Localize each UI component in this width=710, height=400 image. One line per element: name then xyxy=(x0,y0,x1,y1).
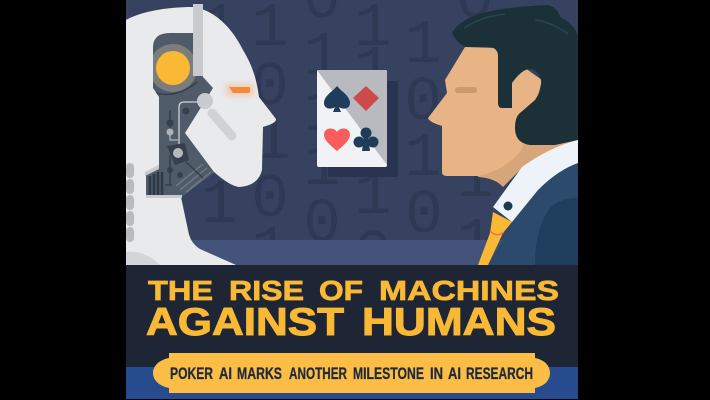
binary digits backdrop: 1 xyxy=(354,36,392,107)
banner text: MARKS xyxy=(237,364,282,383)
card face xyxy=(317,70,387,167)
suit shade xyxy=(535,198,578,265)
banner text xyxy=(170,364,533,383)
binary digits backdrop: 0 xyxy=(404,67,442,138)
title line 1: MACHINES xyxy=(379,275,559,306)
title band xyxy=(126,265,578,367)
title line 2: AGAINST xyxy=(146,301,344,344)
title line 1 xyxy=(148,275,559,306)
floor band xyxy=(126,240,578,265)
robot eye xyxy=(226,84,254,96)
hair xyxy=(452,5,578,145)
card shadow xyxy=(328,81,398,177)
binary digits backdrop: 0 xyxy=(303,189,341,260)
title xyxy=(146,275,559,344)
subtitle banner xyxy=(153,353,550,393)
jaw joint xyxy=(197,93,213,109)
banner text: RESEARCH xyxy=(466,364,533,383)
banner text: AI xyxy=(448,364,461,383)
binary digits backdrop: 0 xyxy=(251,52,289,123)
diamond xyxy=(353,86,379,111)
infographic header xyxy=(126,0,578,399)
binary digits backdrop: 1 xyxy=(354,161,392,232)
robot figure xyxy=(126,4,276,265)
binary digits backdrop: 0 xyxy=(405,180,443,251)
tie xyxy=(478,212,512,265)
binary digits backdrop: 1 xyxy=(456,144,494,215)
title line 2: HUMANS xyxy=(362,301,556,344)
collar xyxy=(493,140,578,222)
card shade xyxy=(317,70,387,165)
cheek bar xyxy=(212,113,232,136)
title line 1: OF xyxy=(319,275,363,306)
suit xyxy=(488,160,578,265)
title line 1: THE xyxy=(148,275,213,306)
collar button xyxy=(504,202,512,210)
binary digits backdrop: 1 xyxy=(253,106,291,177)
neck vents xyxy=(150,172,162,195)
binary digits backdrop: 1 xyxy=(456,208,494,279)
binary digits backdrop: 1 xyxy=(251,216,289,287)
binary digits backdrop: 0 xyxy=(354,220,392,291)
robot gear xyxy=(149,44,211,195)
neck xyxy=(478,140,578,187)
banner text: ANOTHER xyxy=(289,364,347,383)
circuit diagonals xyxy=(176,164,211,192)
tie knot line xyxy=(490,231,504,235)
businessman figure xyxy=(428,5,578,265)
binary digits backdrop xyxy=(205,0,490,240)
banner text: AI xyxy=(219,364,232,383)
binary digits backdrop: 1 xyxy=(303,78,341,149)
binary digits backdrop: 1 xyxy=(404,123,442,194)
title line 1: RISE xyxy=(229,275,304,306)
circuit traces xyxy=(165,102,203,185)
side panel strip xyxy=(193,4,203,76)
robot shoulder xyxy=(126,252,160,265)
blue footer band xyxy=(126,367,578,399)
heart xyxy=(324,129,350,151)
binary digits backdrop: 0 xyxy=(251,164,289,235)
banner shape xyxy=(153,353,550,393)
face xyxy=(428,47,542,176)
wall background xyxy=(126,0,578,240)
binary digits backdrop: 1 xyxy=(200,170,238,241)
robot head and neck xyxy=(126,7,276,265)
binary digits backdrop: 1 xyxy=(303,132,341,203)
playing card xyxy=(317,70,398,177)
club xyxy=(354,128,378,151)
binary digits backdrop: 1 xyxy=(303,22,341,93)
banner text: POKER xyxy=(170,364,213,383)
robot spine beads xyxy=(126,163,134,242)
banner text: IN xyxy=(430,364,443,383)
binary digits backdrop: 1 xyxy=(404,10,442,81)
man's eye xyxy=(455,87,477,93)
circuit nodes xyxy=(145,108,190,198)
hair highlight xyxy=(464,14,568,34)
robot mechanical cavity xyxy=(146,33,214,197)
title line 2 xyxy=(146,301,556,344)
banner text: MILESTONE xyxy=(353,364,424,383)
spade xyxy=(324,86,350,112)
